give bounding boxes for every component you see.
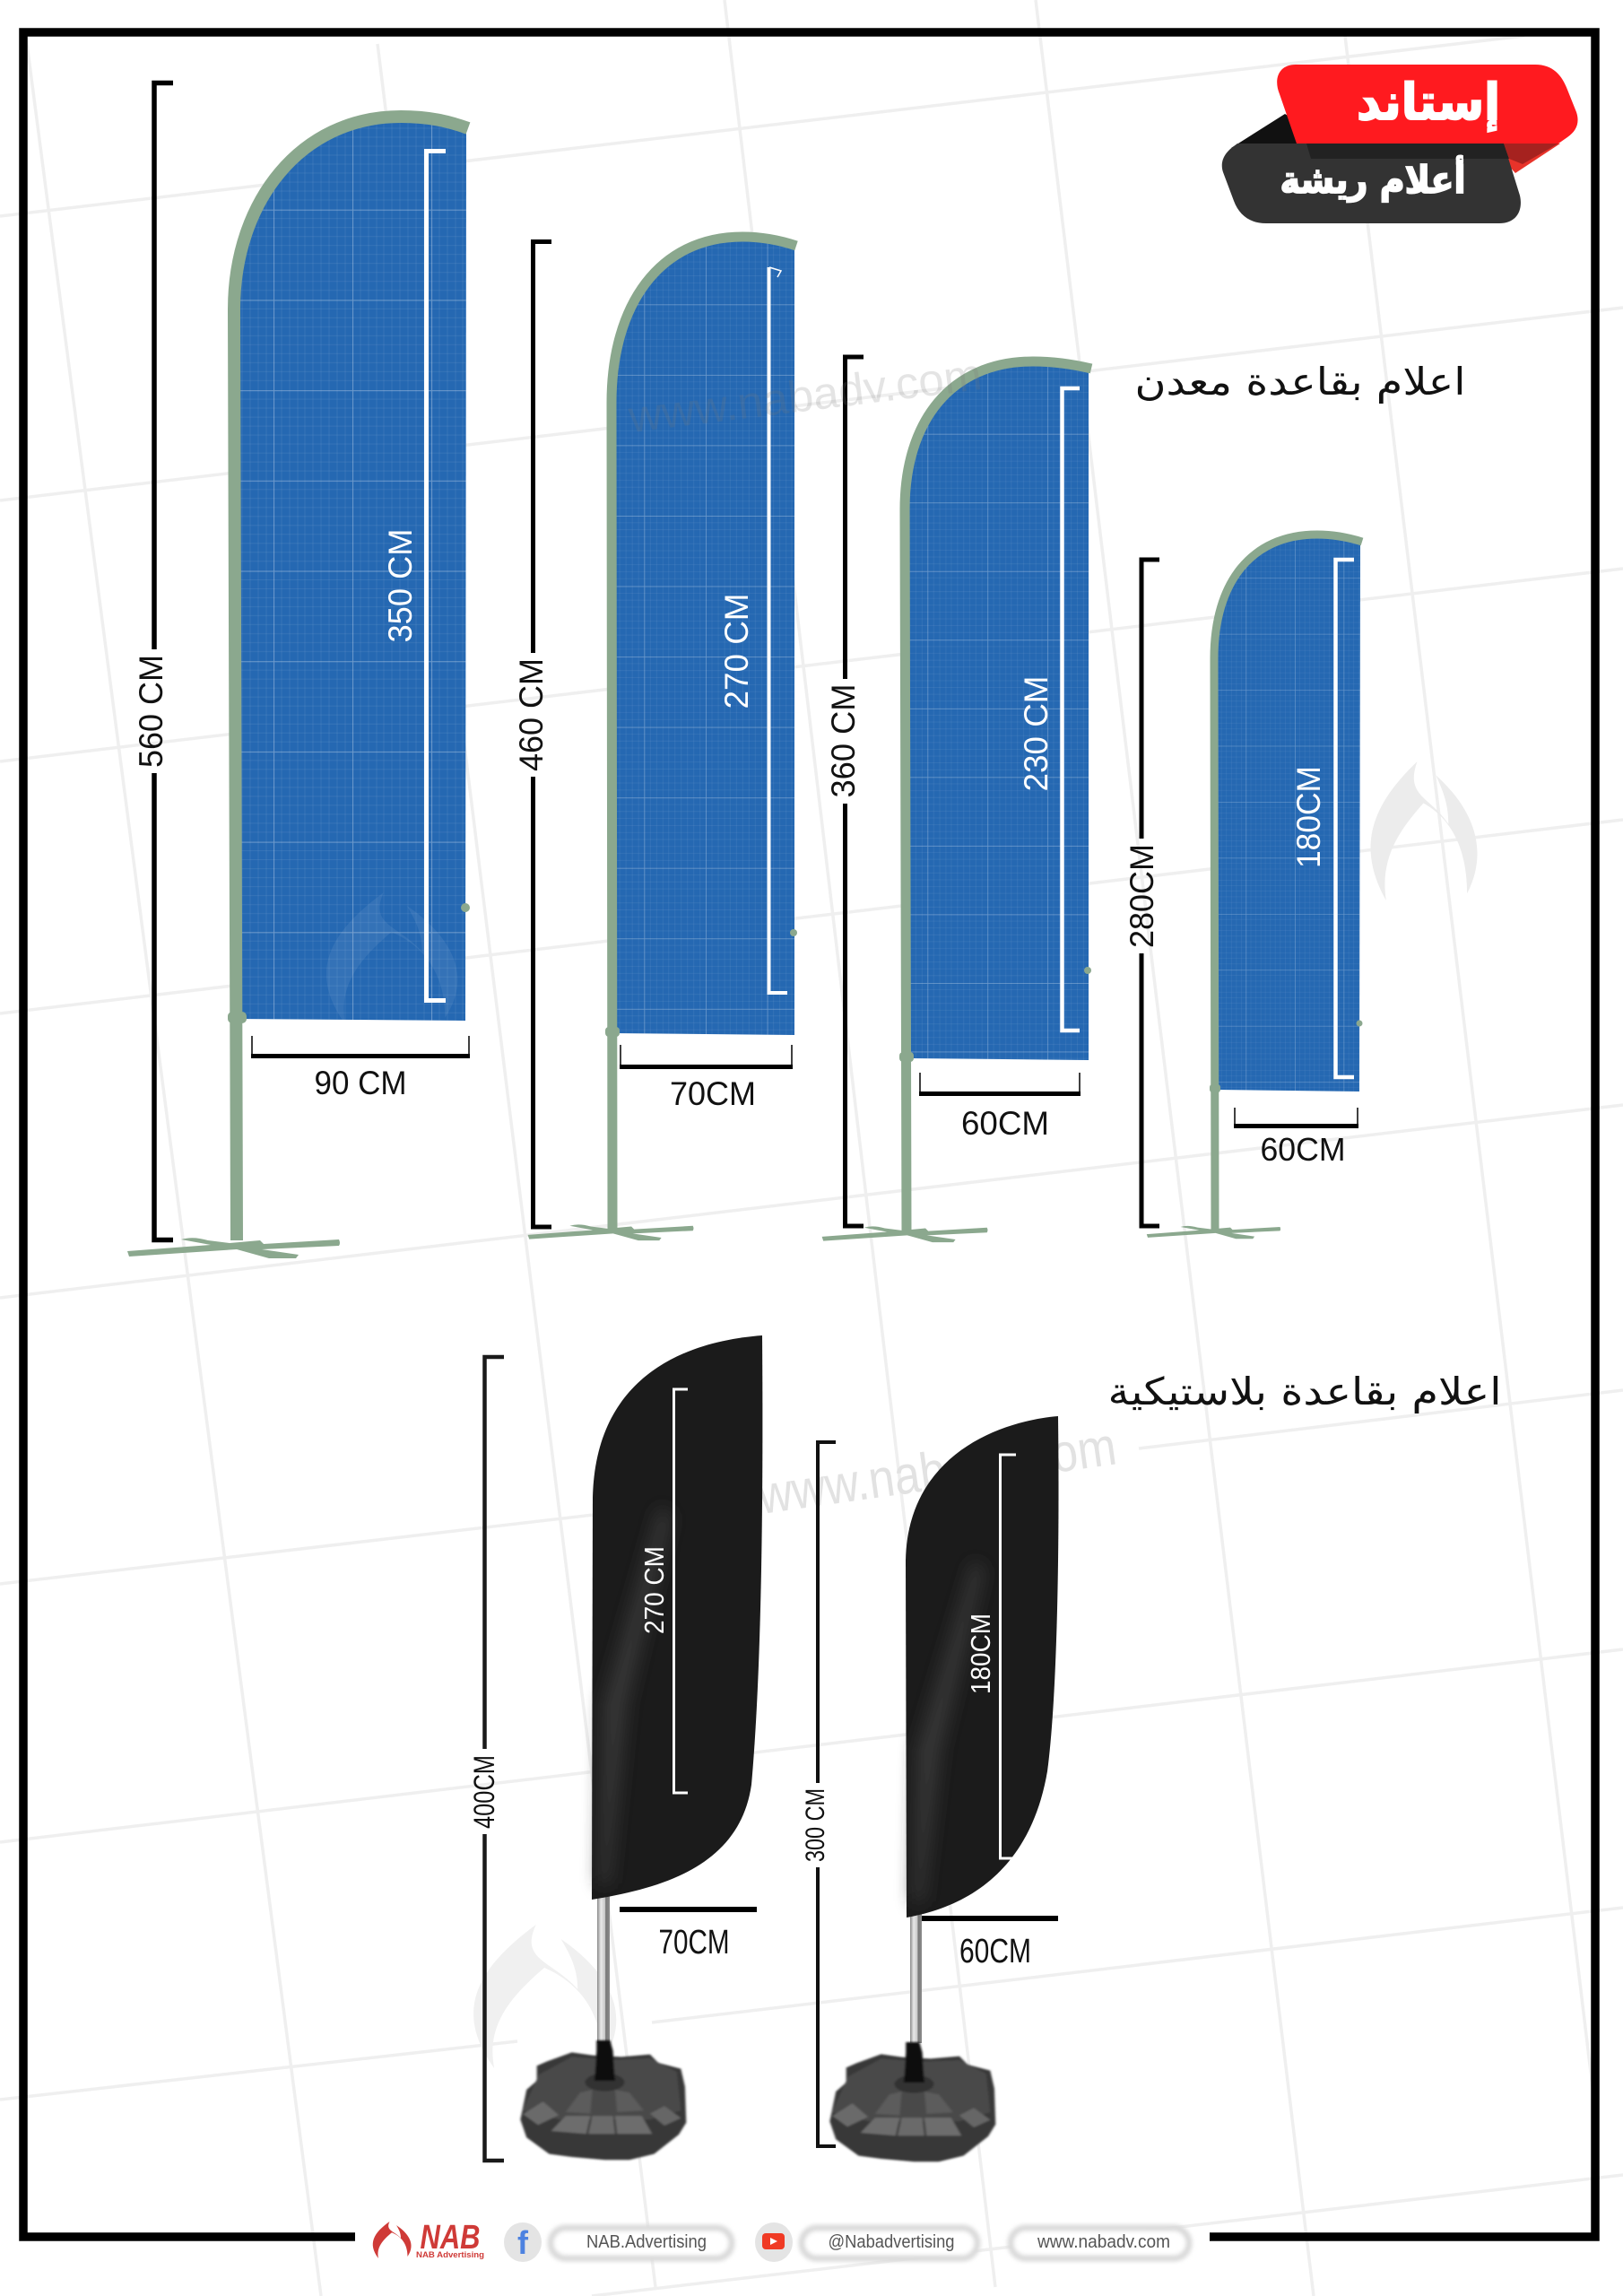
badge heading: stand: إستاند [1357,74,1500,132]
fabric height label: 270 CM [718,594,755,709]
watermark flame on flag [326,892,457,1024]
flag: 560 cm metal [127,83,470,1258]
heading: metal base flags: اعلام بقاعدة معدن [1135,360,1465,404]
height bracket [845,357,864,1226]
fabric height bracket [674,1389,688,1793]
height bracket [154,83,173,1239]
flag: 400 cm plastic [468,1335,762,2161]
flag: 300 cm plastic [801,1416,1058,2161]
badge subheading: feather flags: أعلام ريشة [1280,155,1465,203]
logo: NAB [373,2219,484,2259]
width label: 70CM [670,1075,756,1112]
pole [910,1910,922,2043]
width bracket [620,1907,757,1912]
width bracket [621,1045,792,1065]
logo wordmark: NAB [420,2219,481,2257]
fabric height bracket [427,151,446,1001]
watermark: flame bottom [473,1925,616,2068]
height label: 560 CM [133,655,169,768]
width label: 70CM [658,1924,730,1961]
watermark: website text top: www.nabadv.com [625,349,985,442]
fabric [906,1416,1058,1918]
height label: 300 CM [801,1788,830,1862]
pill: website [1011,2228,1189,2258]
width bracket [252,1036,469,1056]
pole and arc [612,237,796,1229]
fabric height label: 230 CM [1018,676,1055,791]
badge dark shape [1222,144,1521,223]
pill: website: www.nabadv.com [1037,2232,1170,2252]
width label: 90 CM [314,1065,407,1101]
flag: 460 cm metal [513,237,797,1240]
width bracket [1235,1108,1358,1125]
fabric [592,1335,762,1900]
logo tagline: NAB Advertising [416,2250,484,2259]
flag: 360 cm metal [822,357,1091,1242]
watermark: website text middle: www.nabadv.com [754,1416,1120,1526]
width label: 60CM [961,1105,1049,1142]
icon: facebook [504,2222,542,2262]
height bracket [818,1442,836,2146]
fabric height label: 350 CM [382,529,419,642]
pole [597,1892,610,2043]
stand base [528,1224,693,1240]
plastic base [829,2042,995,2161]
height bracket [533,242,551,1227]
pole and arc [1214,535,1362,1231]
icon: youtube [755,2222,793,2262]
fabric height label: 270 CM [638,1546,670,1634]
badge black fold [1231,114,1318,160]
stand base [822,1226,987,1242]
watermark: flame right [1371,761,1477,900]
width label: 60CM [959,1933,1031,1970]
fabric fold highlights [599,1507,673,1883]
height label: 280CM [1124,844,1160,948]
width bracket [922,1916,1058,1921]
icon: facebook: f [517,2224,529,2261]
pill: youtube handle [802,2228,977,2258]
fabric height bracket [1001,1455,1016,1858]
stand base [127,1238,340,1258]
pole and arc [905,361,1091,1234]
flag: 280 cm metal [1124,535,1363,1239]
height label: 460 CM [513,658,550,771]
plastic base [520,2040,686,2160]
badge red shape [1277,65,1578,144]
height bracket [1141,560,1159,1226]
pill: youtube handle: @Nabadvertising [829,2232,954,2252]
badge dark shadow band [1306,144,1509,159]
footer [373,2219,1189,2262]
pole and arc [234,117,468,1240]
width bracket [920,1073,1080,1092]
fabric height bracket [769,267,787,993]
height label: 400CM [468,1755,500,1829]
fabric height bracket [1336,560,1354,1077]
fabric fold highlights [913,1561,985,1901]
badge red lower fold [1488,144,1560,173]
fabric height label: 180CM [1290,766,1327,868]
pill: facebook handle [551,2228,732,2258]
width label: 60CM [1261,1131,1345,1168]
fabric height bracket [1062,388,1080,1031]
heading: plastic base flags: اعلام بقاعدة بلاستيكية [1108,1370,1501,1413]
fabric height label: 180CM [965,1613,996,1694]
badge: title [1222,65,1578,223]
stand base [1147,1226,1280,1239]
height bracket [484,1357,504,2161]
height label: 360 CM [825,683,862,798]
pill: facebook handle: NAB.Advertising [586,2232,707,2252]
